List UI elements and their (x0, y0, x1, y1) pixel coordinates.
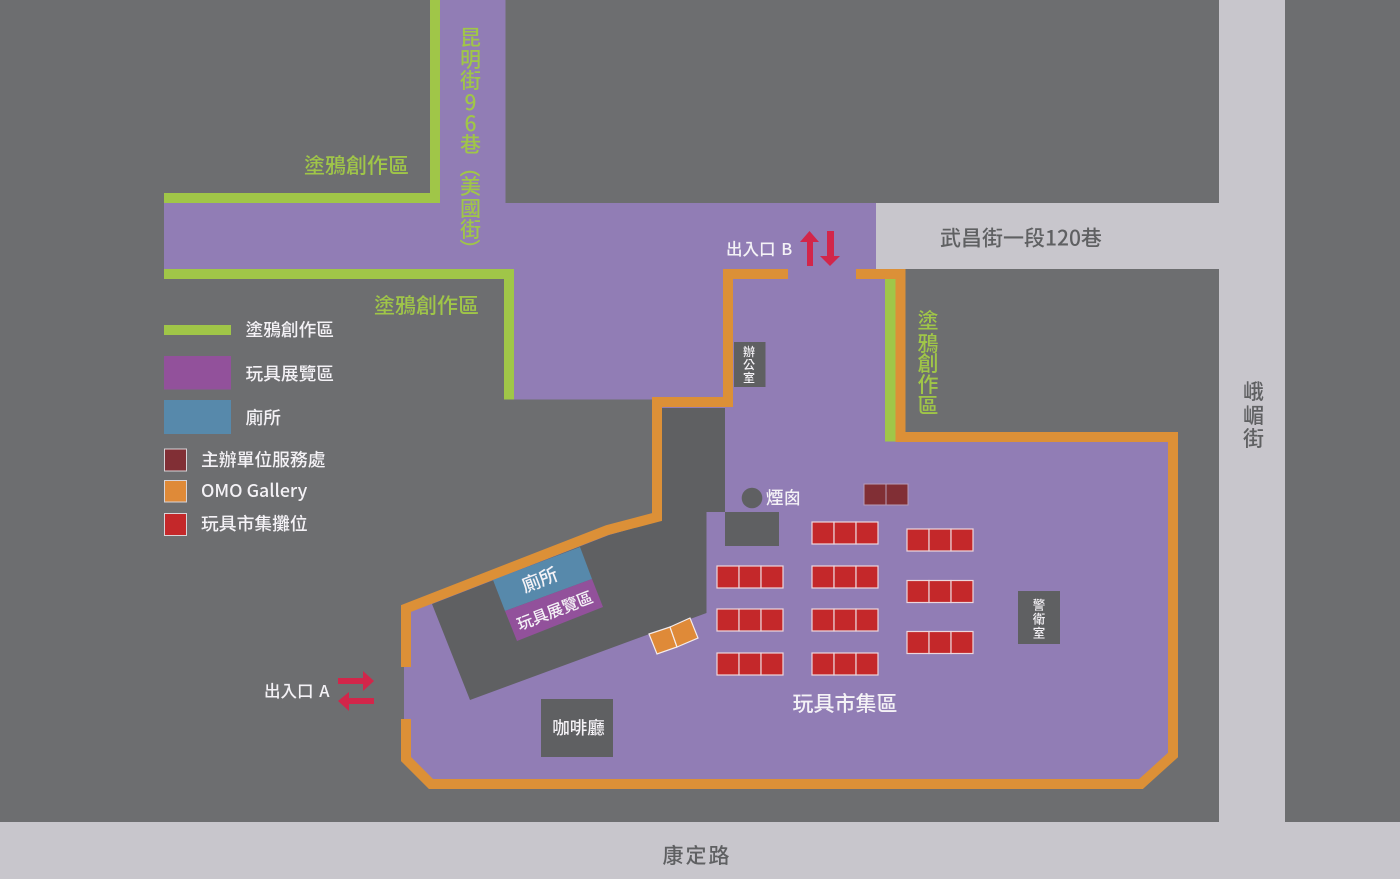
toilet label: 廁所 (518, 561, 561, 598)
alley name: 6 (465, 108, 477, 138)
alley name: 街 (460, 65, 481, 95)
legend: graffiti (164, 316, 334, 342)
stall column 2 (812, 522, 878, 675)
guard room (1018, 591, 1060, 644)
organizer service desk (864, 484, 908, 505)
toilet area (493, 547, 592, 611)
legend: toy exhibition: 玩具展覽區 (246, 360, 334, 386)
legend: toilet: 廁所 (246, 404, 281, 430)
alley name: 明 (460, 44, 481, 74)
alley name: （ (455, 156, 485, 178)
graffiti label vertical: 區 (918, 390, 938, 420)
legend: OMO Gallery: OMO Gallery (201, 477, 308, 503)
toy exhibition label: 玩具展覽區 (513, 584, 596, 635)
entrance B arrows (800, 231, 840, 266)
guard room: 衛 (1033, 608, 1046, 628)
chimney (742, 485, 801, 510)
stall column 3 (907, 529, 973, 654)
guard room: 警 (1033, 594, 1045, 614)
alley name: 昆 (460, 22, 481, 52)
toy market label: 玩具市集區 (792, 688, 898, 718)
alley name: 美 (460, 171, 481, 201)
road name: Emei St: 峨 (1243, 376, 1264, 406)
dark room under chimney (725, 512, 779, 546)
office room: 辦 (743, 343, 755, 360)
graffiti zone lines (164, 0, 890, 442)
legend: graffiti: 塗鴉創作區 (246, 316, 334, 342)
graffiti label vertical (918, 305, 938, 420)
purple walkable area (164, 0, 1173, 784)
road name: Emei St (1243, 376, 1264, 453)
indoor building block (432, 408, 725, 700)
stall column 1 (717, 566, 783, 675)
road name: Kangding Rd: 康定路 (662, 840, 732, 870)
OMO Gallery booths (649, 618, 698, 654)
entrance A arrows (338, 671, 374, 711)
entrance B label: 出入口 B (726, 236, 792, 260)
toy market stalls (717, 522, 973, 675)
alley name: 街 (460, 214, 481, 244)
legend: toy market stall: 玩具市集攤位 (201, 510, 308, 536)
chimney: 煙囪 (766, 485, 801, 510)
alley name: ） (455, 238, 485, 260)
entrance A label: 出入口 A (264, 678, 330, 702)
cafe room: 咖啡廳 (552, 715, 605, 740)
guard room: 室 (1033, 622, 1045, 642)
toilet block (493, 547, 603, 641)
graffiti label vertical: 塗 (918, 305, 938, 335)
graffiti label vertical: 作 (918, 369, 938, 399)
legend: toilet (164, 400, 281, 434)
alley name: 9 (465, 87, 476, 117)
graffiti label top: 塗鴉創作區 (304, 150, 409, 180)
graffiti label middle: 塗鴉創作區 (374, 290, 479, 320)
alley name: 巷 (460, 129, 481, 159)
road name: Emei St: 街 (1243, 423, 1264, 453)
road name: Emei St: 嵋 (1243, 400, 1264, 430)
cafe room (541, 699, 613, 757)
legend: organizer desk: 主辦單位服務處 (201, 446, 326, 472)
alley name: 國 (460, 193, 481, 223)
graffiti label vertical: 鴉 (918, 328, 938, 358)
legend: toy exhibition (164, 356, 334, 390)
orange walls (406, 274, 1173, 784)
graffiti label vertical: 創 (918, 348, 938, 378)
road name: Wuchang St: 武昌街一段120巷 (940, 222, 1102, 252)
office room (734, 342, 766, 387)
legend (164, 316, 334, 536)
office room: 公 (743, 356, 755, 373)
toy exhibition area (505, 579, 603, 641)
alley name (455, 22, 485, 260)
office room: 室 (743, 369, 755, 386)
